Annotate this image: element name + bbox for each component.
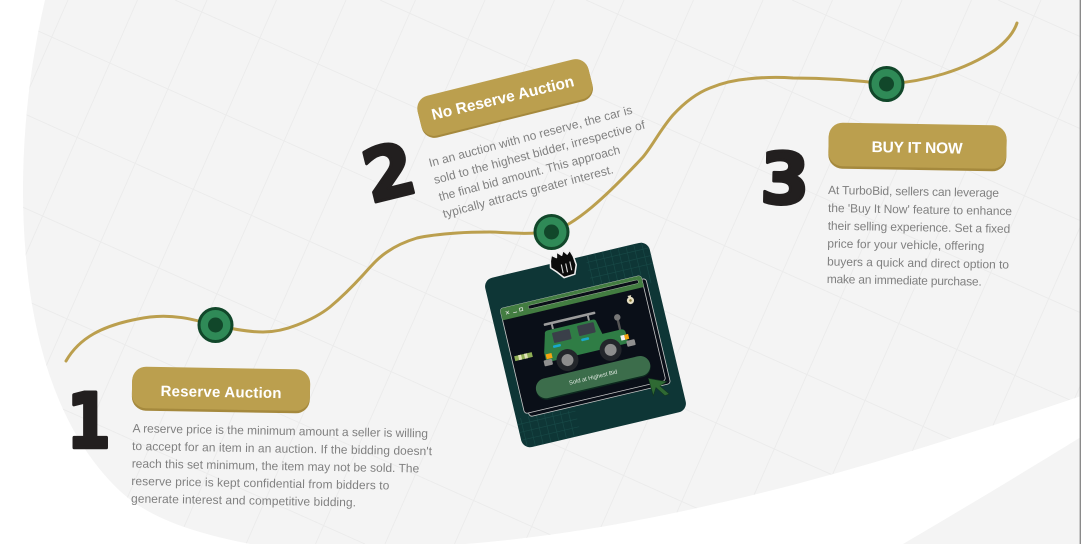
text block 2: typically attracts greater interest. (441, 162, 615, 221)
text block 3: At TurboBid, sellers can leverage (828, 183, 999, 200)
text block 1: generate interest and competitive bidding. (131, 492, 356, 509)
icon: cash (514, 352, 533, 361)
text block 2: In an auction with no reserve, the car is (427, 103, 634, 170)
text block 3: buyers a quick and direct option to (827, 255, 1009, 272)
text block 3: their selling experience. Set a fixed (828, 219, 1010, 236)
browser window (500, 274, 671, 418)
car (535, 304, 638, 376)
node 2 (535, 216, 568, 248)
sold button: Sold at Highest Bid (569, 369, 618, 387)
text block 2: sold to the highest bidder, irrespective of (432, 118, 647, 187)
node 1 (199, 308, 232, 342)
button: BUY IT NOW: BUY IT NOW (871, 139, 963, 158)
button: Reserve Auction: Reserve Auction (160, 383, 282, 402)
number 2: 2 (354, 126, 424, 221)
sold button (534, 354, 653, 402)
icon: money bag (626, 295, 635, 305)
button: No Reserve Auction (415, 56, 596, 141)
text block 1: reach this set minimum, the item may not be sold. The (132, 457, 420, 476)
text block 2: the final bid amount. This approach (437, 143, 622, 204)
text block 3: price for your vehicle, offering (827, 237, 984, 253)
text block 3: the 'Buy It Now' feature to enhance (828, 201, 1012, 218)
timeline curve (66, 23, 1017, 361)
text block 1 (131, 421, 433, 509)
button: Reserve Auction (132, 366, 310, 414)
number 3: 3 (760, 137, 810, 221)
illustration: auction card (483, 241, 688, 449)
number 1: 1 (66, 377, 111, 466)
icon: hand cursor (548, 248, 578, 280)
node 3 (870, 68, 903, 100)
icon: cursor arrow (648, 378, 669, 396)
text block 1: A reserve price is the minimum amount a seller is willing (132, 421, 428, 440)
text block 2 (427, 103, 647, 221)
button: No Reserve Auction: No Reserve Auction (430, 73, 576, 124)
text block 1: reserve price is kept confidential from bidders to (131, 474, 390, 493)
text block 3: make an immediate purchase. (827, 272, 982, 289)
text block 3 (827, 183, 1012, 289)
text block 1: to accept for an item in an auction. If the bidding doesn't (132, 439, 433, 458)
button: BUY IT NOW (828, 122, 1007, 172)
